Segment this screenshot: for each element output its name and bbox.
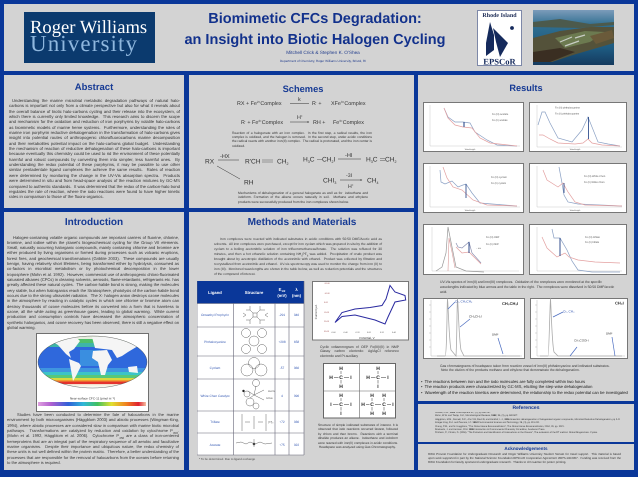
diagram: reaction schemes: 3 bbox=[334, 181, 336, 185]
authors: Mitchell Crick & Stephen K. O'Shea bbox=[286, 50, 360, 55]
diagram: iodinated substrate structures: H bbox=[370, 393, 374, 399]
diagram: reaction schemes: Complex bbox=[260, 101, 282, 107]
chart: UV-Vis OEP: ~ nm bbox=[476, 247, 481, 250]
diagram: reaction schemes: CH bbox=[385, 156, 395, 164]
chart: UV-Vis triflate: Fe (II) triflate bbox=[585, 241, 600, 244]
chart: cyclic voltammogram: Current µA bbox=[314, 305, 318, 319]
chart: UV-Vis phthalocyanine: Wavelength bbox=[570, 148, 580, 151]
table rows: 390 bbox=[294, 394, 299, 398]
diagram: reaction schemes: R bbox=[241, 120, 245, 126]
text: methods body: Iron complexes were reacted with indicated substrates in acidic conditions with 50:50 DMF/Acetic acid as solvents. All iron complexes were purchased, except for iron cyclam which was prepared in situ by the addition of cyclam to a boiling acetonitrile solution of iron trifluoromethanesulfonate. The solution was refluxed for 30 minutes, and then a hot ethanolic solution containing NH 4PF 6 was added. Precipitation of crude product was brought about by azeotropic distillation of the acetonitrile with ethanol. Product was collected by filtration and recrystallized from acetonitrile and ethanol. UV-vis spectroscopy was used to monitor the change from iron (II) to iron (III). Monitored wavelengths are shown in the table below, as well as reduction potentials and the structures of the compound of interest. bbox=[214, 237, 382, 276]
list: key results bbox=[421, 378, 628, 395]
diagram: reaction schemes: RH + bbox=[313, 120, 325, 126]
diagram: iodinated substrate structures: I bbox=[392, 402, 394, 408]
department: Department of Chemistry, Roger Williams University, Bristol, RI bbox=[280, 59, 366, 63]
diagram: iodinated substrate structures bbox=[323, 363, 396, 418]
diagram: reaction schemes: 3+ bbox=[339, 119, 343, 123]
chart: UV-Vis acetate: Fe (II) acetate bbox=[492, 119, 508, 122]
table rows: -57 bbox=[280, 366, 285, 370]
panel: abstract bbox=[4, 75, 184, 208]
text: scheme caption two: Mechanisms of dehalogenation of a general halogenate as well as for iodoethane and iodoform. Formation of the alkene occurs naturally in soil. Methane and ethylene products were successfully produced from the iron complexes shown below. bbox=[238, 190, 368, 204]
text: UV-Vis caption: UV-Vis spectra of iron(II) and iron(III) complexes. Oxidation of the complexes were monitored at the specific wavelengths indicated by blue arrows and the table to the right. The complexes were dissolved in 50:50 DMF/acetic acid. bbox=[440, 280, 614, 294]
text: references list: Mohn, W.W. and Tiedje, J.M., Microbiological Reviews, 1992 , 56, (3), pp 482-507. bbox=[435, 415, 518, 417]
table rows bbox=[200, 313, 299, 447]
chart: GC iodoethane: CH₃CH₂I bbox=[502, 301, 518, 306]
table rows: 658 bbox=[294, 340, 299, 344]
diagram: reaction schemes: 3 bbox=[371, 160, 373, 164]
diagram: reaction schemes: 3 bbox=[308, 160, 310, 164]
list: key results: • The reaction products were characterized by GC-MS, eliciting the step-wise dehalogenation bbox=[421, 384, 592, 389]
diagram: iodinated substrate structures: H bbox=[366, 375, 370, 381]
logo: Roger Williams University bbox=[24, 12, 155, 63]
table rows: 322 bbox=[294, 443, 299, 447]
heading: Introduction: Introduction bbox=[65, 217, 123, 228]
chart: GC iodomethane: CH₃COOH bbox=[574, 338, 589, 342]
diagram: reaction schemes: RH bbox=[244, 180, 254, 186]
chart: UV-Vis cyclam: Fe (III) cyclam bbox=[491, 176, 507, 179]
diagram: reaction schemes: RX bbox=[205, 158, 215, 166]
diagram: iodinated substrate structures: H bbox=[339, 366, 343, 372]
chart: cyclic voltammogram: 0.00 bbox=[324, 301, 329, 304]
diagram: iodinated substrate structures: H bbox=[339, 393, 343, 399]
diagram: reaction schemes: Complex bbox=[343, 120, 364, 126]
list: key results: • The reactions between iron and the iodo molecules are fully completed within two hours bbox=[421, 378, 585, 384]
text: references list: Gribble, G.W., 2003 Chemosphere 52, (2), pp 289-297. bbox=[435, 412, 491, 414]
diagram: iodinated substrate structures: I bbox=[377, 384, 379, 390]
chart: UV-Vis triflate bbox=[529, 224, 627, 275]
table: ligands: MeCN bbox=[268, 390, 275, 393]
diagram: iodinated substrate structures: I bbox=[340, 411, 342, 417]
chart: UV-Vis White Chen: Fe (III) White-Chen bbox=[584, 175, 606, 178]
diagram: iodinated substrate structures: H bbox=[382, 393, 386, 399]
diagram: iodinated substrate structures: I bbox=[330, 402, 332, 408]
panel: methods and materials bbox=[189, 212, 414, 470]
table header: (mV) bbox=[277, 293, 287, 298]
table header: E bbox=[279, 287, 281, 292]
table header: (nm) bbox=[292, 293, 302, 298]
diagram: reaction schemes: 4 bbox=[377, 181, 379, 185]
panel: schemes bbox=[189, 75, 414, 208]
text: introduction body: Halogen-containing volatile organic compounds are important carriers of fluorine, chlorine, bromine, and iodine within the planet's biogeochemical cycling for the Group VII elements. Small, naturally occurring halorganic compounds, mainly containing chlorine and bromine are either produced by living organisms or formed during processes such as volcanic eruptions, forest fires, and geochemical transformations (Gribble 2003). These compounds are usually benign, having relatively short lifetimes, being transformed either by hydrolysis, consumed as co-factors in microbial metabolism or by photochemical decomposition in the lower troposphere (Mohn et al. 1992). However, commercial use of anthropogenic chloro-fluorinated saturated alkanes (CFCs) in cleaning solvents, aerosols, flame-retardants, refrigerants etc. has greatly affected these natural cycles. The carbon-halide bond is strong, making the molecules very stable, but when halorganics reach the Stratosphere, photolysis of the carbon-halide bond occurs due to the strong ultraviolet radiation. The X· halogen anion destroys ozone molecules in the atmosphere by reacting in catalytic cycles in which one chlorine or bromine atom can destroy thousands of ozone molecules before its converted into a form that is harmless to ozone, all the while acting as greenhouse gases, leading to global warming. While current production and consumption controls have decreased the atmospheric concentration of synthetic halorganics, and ozone recovery has been observed, there is still a negative effect on global warming. bbox=[7, 234, 179, 330]
heading: Methods and Materials: Methods and Materials bbox=[248, 217, 356, 228]
heading: Abstract: Abstract bbox=[75, 82, 113, 93]
diagram: reaction schemes: CH bbox=[277, 158, 287, 166]
structures bbox=[236, 306, 272, 447]
diagram: reaction schemes: k bbox=[298, 97, 301, 103]
diagram: reaction schemes: C bbox=[310, 156, 315, 164]
chart: UV-Vis White Chen: Fe (II) White-Chen bbox=[584, 181, 605, 184]
table rows: +75 bbox=[279, 443, 285, 447]
heading: Acknowledgements: Acknowledgements bbox=[504, 446, 548, 450]
text: GC caption: Gas chromatograms of headspace taken from reaction vessel of iron(II) phthalocyanine and iodinated substrates. Note the elution of the products methane and ethylene that demonstrate the dehalogenation. bbox=[440, 364, 610, 372]
table rows: Triflate bbox=[210, 420, 220, 424]
diagram: reaction schemes: XFe bbox=[331, 101, 341, 107]
text: abstract body: Understanding the marine microbial metabolic degradation pathways of natural halo-carbons is important not only from a climate perspective but also for what it reveals about the overall balance of biotic halo-carbons cycling and their release into the ecosystem, of which there is currently only limited knowledge. This research aims to discern the scope and mechanism for the oxidation and reduction of iron porphyrins by volatile halo-carbons as biomimetic models of marine heme systems. Furthermore, understanding the roles of marine iron porphyrin reductive dehalogenation in the transformation of halo-carbons gives insight into potential routes of anthropogenic chlorofluorocarbons marine decomposition and their metabolites potential impact on the halo-carbons global budget. Understanding the mechanism of reaction of reductive dehalogenation of these halo-carbons is important because eventually this chemistry could be used to rid the environment of these potentially harmful and robust compounds by converting them into simpler, less harmful ones. By understanding the redox potential of these porphyrins, it may be possible to use other similar pentadentate ligand complexes the achieve the same results. Rates of reaction were determined by monitoring the change in the UV-Vis absorption spectra. Products were determined in situ and from head-space analysis of the reaction mixtures by GC-MS compared to authentic standards. It was determined that the redox of the carbon-halo bond regulates the rate of reaction, where the iodo reactions were found to have higher kinetic rates in comparison to those of the fluoro-organics. bbox=[9, 98, 180, 199]
diagram: reaction schemes: RX + Fe bbox=[237, 101, 257, 107]
diagram: reaction schemes: -HX bbox=[220, 154, 230, 160]
diagram: reaction schemes: 2 bbox=[332, 160, 334, 164]
chart: UV-Vis phthalocyanine: Fe (III) phthalocyanine bbox=[555, 106, 580, 110]
diagram: reaction schemes bbox=[205, 97, 397, 190]
text: introduction second paragraph: Studies have been conducted to determine the fate of halocarbons in the marine environment by both microorganisms (Häggblom 2003) and abiotic processes (Wingman-King, 1994), where abiotic processes are considered slow in comparison with marine biotic microbial pathways. Transformations are catalyzed by reduction and oxidation by cytochrome P450. (Mohn et al. 1992, Häggblom et al. 2006). Cytochrome P450 are a class of iron-centered hemeproteins that are an integral part of the respiratory sequence of all aerobic and facultative marine organisms. Despite their importance and ubiquitous nature, the redox chemistry of these units is not well defined within the protein matrix. Therefore, a better understanding of the processes that are responsible for the removal of halocarbons from the oceans before returning to the atmosphere is required. bbox=[7, 412, 179, 465]
diagram: iodinated substrate structures: C bbox=[382, 402, 386, 408]
diagram: reaction schemes: Fe bbox=[333, 120, 339, 126]
heading: Results: Results bbox=[509, 83, 543, 93]
text: voltammogram caption: Cyclic voltammogram of OEP Fe(III)/(II) in NMP Glassy carbon electrode: Ag/AgCl reference electrode and Pt auxiliary bbox=[320, 344, 399, 358]
panel: acknowledgements bbox=[418, 444, 634, 470]
diagram: iodinated substrate structures: C bbox=[376, 375, 380, 381]
logo: Roger Williams University: University bbox=[30, 31, 138, 56]
chart: UV-Vis White Chen bbox=[529, 163, 627, 213]
chart: GC iodomethane: O₂, CH₄ bbox=[563, 310, 575, 314]
table header: Ligand bbox=[208, 290, 222, 295]
text: substrate caption: Structure of simple iodinated substrates of interest. It is observed that iodo reactions occurred fastest, followed by chloro and then bromo. Reactions with a terminal dihalide produces an alkene. Iodoethane and iodoform were reacted with iron(II) complexes in acidic conditions. Headspace was analyzed using Gas Chromatography. bbox=[318, 422, 398, 449]
photo: aerial view of campus bbox=[533, 10, 614, 65]
panel: introduction bbox=[4, 212, 184, 470]
table rows: 340 bbox=[294, 313, 299, 317]
table header: Structure bbox=[245, 290, 264, 295]
diagram: reaction schemes: 2+ bbox=[258, 119, 262, 123]
table rows: 330 bbox=[294, 420, 299, 424]
text: references list: Chang, P.W., and M. Haggblom, "The Global Heme Biomineralization", The Global Heme Biomineralization, 2004, 29, pp. 3021. bbox=[435, 426, 564, 428]
text: references list: Krieger-King, R.A. and Pescara, I.C. 1994 Environmental Science and Technology, 28, (3), pp 424-431. bbox=[435, 422, 540, 424]
heading: Schemes: Schemes bbox=[283, 84, 323, 94]
chart: GC iodoethane bbox=[423, 298, 525, 359]
chart: cyclic voltammogram: 0.20 bbox=[380, 331, 385, 334]
diagram: iodinated substrate structures: H bbox=[329, 375, 333, 381]
diagram: reaction schemes: CH bbox=[367, 178, 377, 184]
table rows: 4 bbox=[281, 394, 283, 398]
chart: cyclic voltammogram: -20.00 bbox=[324, 282, 331, 285]
chart: UV-Vis OEP bbox=[423, 224, 524, 275]
diagram: reaction schemes: H bbox=[303, 156, 308, 164]
table rows: 360 bbox=[294, 366, 299, 370]
chart: cyclic voltammogram: 20.00 bbox=[324, 320, 330, 323]
chart: UV-Vis cyclam: Wavelength bbox=[465, 209, 475, 212]
diagram: reaction schemes: + bbox=[317, 101, 322, 107]
chart: UV-Vis phthalocyanine bbox=[529, 102, 627, 152]
chart: cyclic voltammogram: -10.00 bbox=[324, 292, 331, 295]
logo: Rhode Island EPSCoR bbox=[477, 10, 522, 66]
table rows: White Chen Catalyst bbox=[200, 394, 230, 398]
diagram: iodinated substrate structures: C bbox=[370, 402, 374, 408]
panel: results bbox=[418, 75, 634, 401]
chart: GC iodomethane: DMF bbox=[606, 332, 613, 336]
diagram: reaction schemes: H bbox=[366, 156, 371, 164]
title: Biomimetic CFCs Degradation: bbox=[208, 11, 422, 27]
chart: UV-Vis triflate: Fe (III) triflate bbox=[585, 236, 600, 239]
chart: UV-Vis phthalocyanine: Fe (II) phthalocyanine bbox=[555, 112, 580, 116]
chart: GC iodomethane bbox=[530, 298, 628, 359]
diagram: reaction schemes: · bbox=[316, 100, 317, 104]
diagram: reaction schemes: I bbox=[334, 156, 336, 164]
diagram: iodinated substrate structures: H bbox=[376, 366, 380, 372]
diagram: reaction schemes: + bbox=[301, 114, 303, 118]
diagram: reaction schemes: · bbox=[245, 119, 246, 123]
map: sea-surface CFC-11 bbox=[36, 333, 149, 412]
diagram: reaction schemes: -3I bbox=[346, 173, 352, 179]
chart: UV-Vis cyclam: Fe (II) cyclam bbox=[491, 182, 506, 185]
table: ligands bbox=[197, 281, 304, 461]
chart: GC iodomethane: CH₃I bbox=[615, 300, 624, 306]
diagram: reaction schemes: 2 bbox=[395, 160, 397, 164]
panel: header bbox=[4, 4, 634, 71]
diagram: iodinated substrate structures: I bbox=[350, 402, 352, 408]
table rows: -291 bbox=[279, 313, 285, 317]
table rows: Octaethyl Porphyrin bbox=[201, 313, 229, 317]
chart: cyclic voltammogram: -0.20 bbox=[355, 331, 360, 334]
text: references list: Rowlands, J. and Harrison, R.M. 1999 Introduction to Environmental Chemistry 3rd edition, Academic Press. bbox=[435, 429, 545, 431]
table header: λ bbox=[295, 287, 298, 292]
chart: UV-Vis cyclam bbox=[423, 163, 524, 213]
diagram: reaction schemes: CHI bbox=[323, 178, 334, 184]
table header bbox=[197, 281, 304, 304]
table rows: +72 bbox=[279, 420, 285, 424]
diagram: iodinated substrate structures: C bbox=[339, 375, 343, 381]
table header: 1/2 bbox=[281, 289, 286, 293]
diagram: reaction schemes: 2 bbox=[287, 162, 289, 166]
diagram: iodinated substrate structures: H bbox=[382, 411, 386, 417]
map: sea-surface CFC-11: Near-surface CFC-11 (pmol m⁻³) bbox=[70, 396, 115, 400]
diagram: iodinated substrate structures: I bbox=[387, 375, 389, 381]
logo: Rhode Island EPSCoR: Rhode Island bbox=[482, 12, 517, 19]
chart: UV-Vis White Chen: Wavelength bbox=[570, 209, 580, 212]
chart: cyclic voltammogram: -0.40 bbox=[343, 331, 348, 334]
diagram: reaction schemes: H bbox=[348, 184, 352, 190]
title: an Insight into Biotic Halogen Cycling bbox=[184, 32, 446, 48]
diagram: iodinated substrate structures: H bbox=[339, 384, 343, 390]
diagram: reaction schemes: C bbox=[373, 156, 378, 164]
diagram: reaction schemes: R bbox=[312, 101, 316, 107]
panel: references bbox=[418, 404, 634, 442]
diagram: reaction schemes: 2+ bbox=[257, 100, 261, 104]
table: ligands: (Tf)₂ bbox=[268, 420, 273, 424]
table: ligands: NCMe bbox=[266, 397, 273, 400]
chart: GC iodoethane: DMF bbox=[492, 332, 499, 336]
chart: cyclic voltammogram: 10.00 bbox=[324, 311, 330, 314]
chart: UV-Vis acetate: Wavelength bbox=[465, 148, 475, 151]
diagram: reaction schemes: Complex bbox=[262, 120, 283, 126]
chart: cyclic voltammogram: -0.60 bbox=[331, 331, 336, 334]
diagram: reaction schemes: CH bbox=[322, 156, 332, 164]
table rows: Acetate bbox=[210, 443, 221, 447]
chart: UV-Vis OEP: Fe (III) OEP bbox=[486, 236, 500, 239]
chart: cyclic voltammogram: 0.00 bbox=[367, 331, 372, 334]
chart: UV-Vis OEP: Fe (II) OEP bbox=[486, 243, 499, 246]
table rows: Cyclam bbox=[210, 366, 221, 370]
diagram: reaction schemes: H bbox=[297, 115, 301, 121]
title bbox=[184, 11, 446, 48]
diagram: reaction schemes: + bbox=[352, 183, 354, 187]
chart: cyclic voltammogram: 30.00 bbox=[324, 330, 330, 333]
table rows: +208 bbox=[278, 340, 286, 344]
table rows: Phthalocyanine bbox=[204, 340, 226, 344]
text: references list bbox=[435, 412, 620, 434]
diagram: reaction schemes: 3+ bbox=[341, 100, 345, 104]
diagram: reaction schemes: -HI bbox=[345, 153, 353, 159]
chart: GC iodoethane: O₂, CH₃CH₃ bbox=[455, 300, 473, 304]
chart: cyclic voltammogram: Potential, V bbox=[359, 336, 375, 340]
chart: GC iodoethane: CH₃CH₂I bbox=[469, 314, 482, 318]
heading: References: References bbox=[513, 405, 539, 411]
diagram: reaction schemes: R'CH bbox=[245, 158, 261, 166]
footnote: * To be determined. Due to ligand exchange bbox=[199, 457, 256, 461]
chart: cyclic voltammogram bbox=[312, 281, 409, 340]
list: key results: • Wavelength of the reaction kinetics were determined, the relationship to the redox potential can be investigated bbox=[421, 390, 628, 394]
diagram: iodinated substrate structures: H bbox=[361, 402, 365, 408]
diagram: reaction schemes: + Fe bbox=[246, 120, 258, 126]
chart: cyclic voltammogram: 0.40 bbox=[392, 331, 397, 334]
diagram: iodinated substrate structures: H bbox=[370, 411, 374, 417]
chart: UV-Vis acetate: Fe (III) acetate bbox=[492, 113, 509, 116]
chart: UV-Vis acetate bbox=[423, 102, 524, 152]
diagram: reaction schemes: Complex bbox=[344, 101, 366, 107]
text: references list: Prothero, P., Christo, D. (2006). "The Extraction and Identification of Halocarbons in the Oceans", The evaluation of the RT method. Global Biogeochem. Cycles. bbox=[435, 432, 598, 434]
logo: Roger Williams University: Roger Williams bbox=[30, 17, 147, 38]
text: acknowledgements body: RWU Provost Foundation for Undergraduate Research and Roger Williams University Student Senate for travel support. This material is based upon work supported in part by the National Science Foundation EPSCoR Cooperative Agreement #EPS-1004057. Funding was received from the RWU Foundation for faculty sponsored undergraduate research. Thanks to Jim Gamse for poster printing. bbox=[428, 452, 621, 464]
diagram: iodinated substrate structures: I bbox=[350, 375, 352, 381]
diagram: iodinated substrate structures: C bbox=[339, 402, 343, 408]
text: scheme caption one: Reaction of a halogenate with an iron complex. In the first step, a radical results, the iron complex is oxidized, and the halogen is removed. In the second step, under acidic conditions the radical reacts with another iron(II) complex. The radical is protonated, and the iron center is oxidized. bbox=[232, 130, 372, 148]
